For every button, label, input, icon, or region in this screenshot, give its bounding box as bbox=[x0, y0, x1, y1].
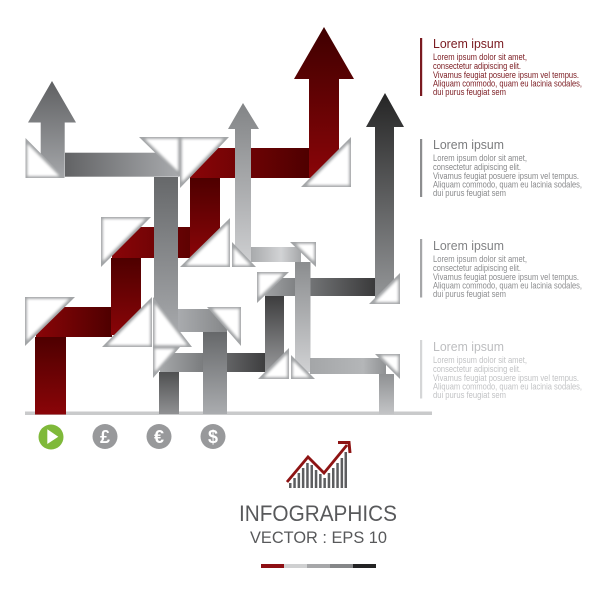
title: INFOGRAPHICS bbox=[239, 501, 397, 526]
subtitle: VECTOR : EPS 10 bbox=[250, 529, 387, 547]
text block 2: consectetur adipiscing elit. bbox=[433, 162, 521, 172]
lower right connector bands bbox=[295, 262, 394, 414]
text block 3: consectetur adipiscing elit. bbox=[433, 263, 521, 273]
icon: growth chart bbox=[287, 442, 350, 488]
icon: green play button bbox=[38, 424, 64, 450]
text block 4: Lorem ipsum dolor sit amet, bbox=[433, 355, 527, 365]
arrow: dark upward path bbox=[265, 93, 404, 372]
icon: euro: € bbox=[154, 427, 164, 447]
text block 2: Lorem ipsum bbox=[433, 137, 504, 152]
text block 1: consectetur adipiscing elit. bbox=[433, 61, 521, 71]
text block 4: dui purus feugiat sem bbox=[433, 390, 506, 400]
text block 4: consectetur adipiscing elit. bbox=[433, 364, 521, 374]
text block 2: dui purus feugiat sem bbox=[433, 188, 506, 198]
text block 4: Lorem ipsum bbox=[433, 339, 504, 354]
arrow: red upward path bbox=[35, 27, 354, 414]
text block 1: dui purus feugiat sem bbox=[433, 87, 506, 97]
text block 3: Lorem ipsum bbox=[433, 238, 504, 253]
text block 3: dui purus feugiat sem bbox=[433, 289, 506, 299]
text block 2 bbox=[420, 137, 582, 198]
text block 2: Lorem ipsum dolor sit amet, bbox=[433, 153, 527, 163]
icon: dollar bbox=[200, 424, 226, 449]
icon: pound bbox=[92, 424, 118, 449]
text block 1: Lorem ipsum bbox=[433, 36, 504, 51]
baseline bbox=[25, 412, 432, 415]
icon: euro bbox=[146, 424, 172, 449]
arrow: medium grey upward path bbox=[28, 81, 265, 414]
text block 1: Lorem ipsum dolor sit amet, bbox=[433, 52, 527, 62]
icon: dollar: $ bbox=[208, 427, 218, 447]
text block 4 bbox=[420, 339, 582, 400]
text block 3 bbox=[420, 238, 582, 299]
colour strip bbox=[261, 564, 376, 568]
text block 1 bbox=[420, 36, 582, 97]
icon: pound: £ bbox=[100, 427, 110, 447]
folded white triangles bbox=[25, 137, 400, 379]
text block 3: Lorem ipsum dolor sit amet, bbox=[433, 254, 527, 264]
arrow: light grey upward path bbox=[228, 103, 301, 265]
